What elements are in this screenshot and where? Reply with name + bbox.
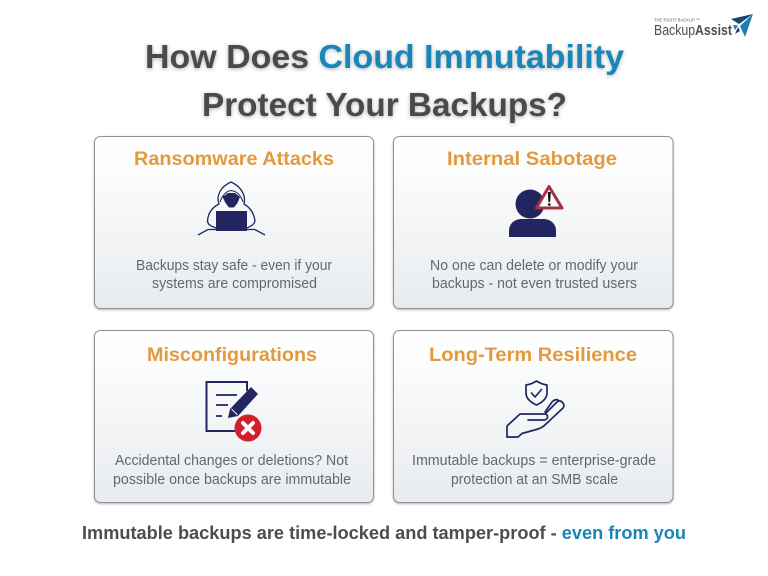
heading: long-term resilience: Long-Term Resilience: [429, 345, 637, 366]
panel: ransomware attacks: [94, 136, 374, 308]
body text: long-term resilience: Immutable backups = enterprise-grade: [412, 453, 656, 469]
body text: misconfigurations: [113, 453, 351, 488]
icon: person with warning triangle: [509, 186, 562, 237]
icon: document with pencil and red cross: [206, 382, 262, 442]
panel: misconfigurations: [94, 330, 374, 502]
logo icon: paper plane: [731, 14, 753, 37]
body text: misconfigurations: Accidental changes or deletions? Not: [115, 453, 348, 469]
panel: long-term resilience: [394, 330, 673, 502]
logo: BackupAssist: [654, 14, 753, 39]
icon: hooded hacker at laptop: [198, 182, 265, 235]
body text: ransomware attacks: [136, 258, 332, 292]
panel: internal sabotage: [394, 136, 673, 308]
logo tagline: THE RIGHT BACKUP ™: [654, 18, 700, 22]
body text: internal sabotage: No one can delete or modify your: [430, 258, 638, 274]
heading: ransomware attacks: Ransomware Attacks: [134, 149, 334, 170]
body text: long-term resilience: protection at an SMB scale: [451, 472, 618, 488]
title: [145, 38, 625, 123]
body text: long-term resilience: [412, 453, 656, 488]
title line 2: Protect Your Backups?: [202, 86, 567, 123]
body text: ransomware attacks: Backups stay safe - even if your: [136, 258, 332, 274]
heading: misconfigurations: Misconfigurations: [147, 345, 317, 366]
body text: misconfigurations: possible once backups are immutable: [113, 472, 351, 488]
body text: internal sabotage: [430, 258, 638, 292]
logo wordmark: BackupAssist: [654, 22, 732, 39]
body text: ransomware attacks: systems are compromised: [152, 276, 317, 292]
body text: internal sabotage: backups - not even trusted users: [432, 276, 637, 292]
icon: hand holding shield: [507, 381, 564, 437]
heading: internal sabotage: Internal Sabotage: [447, 149, 617, 170]
title line 1: How Does Cloud Immutability: [145, 38, 625, 75]
footer statement: Immutable backups are time-locked and tamper-proof - even from you: [82, 523, 686, 543]
